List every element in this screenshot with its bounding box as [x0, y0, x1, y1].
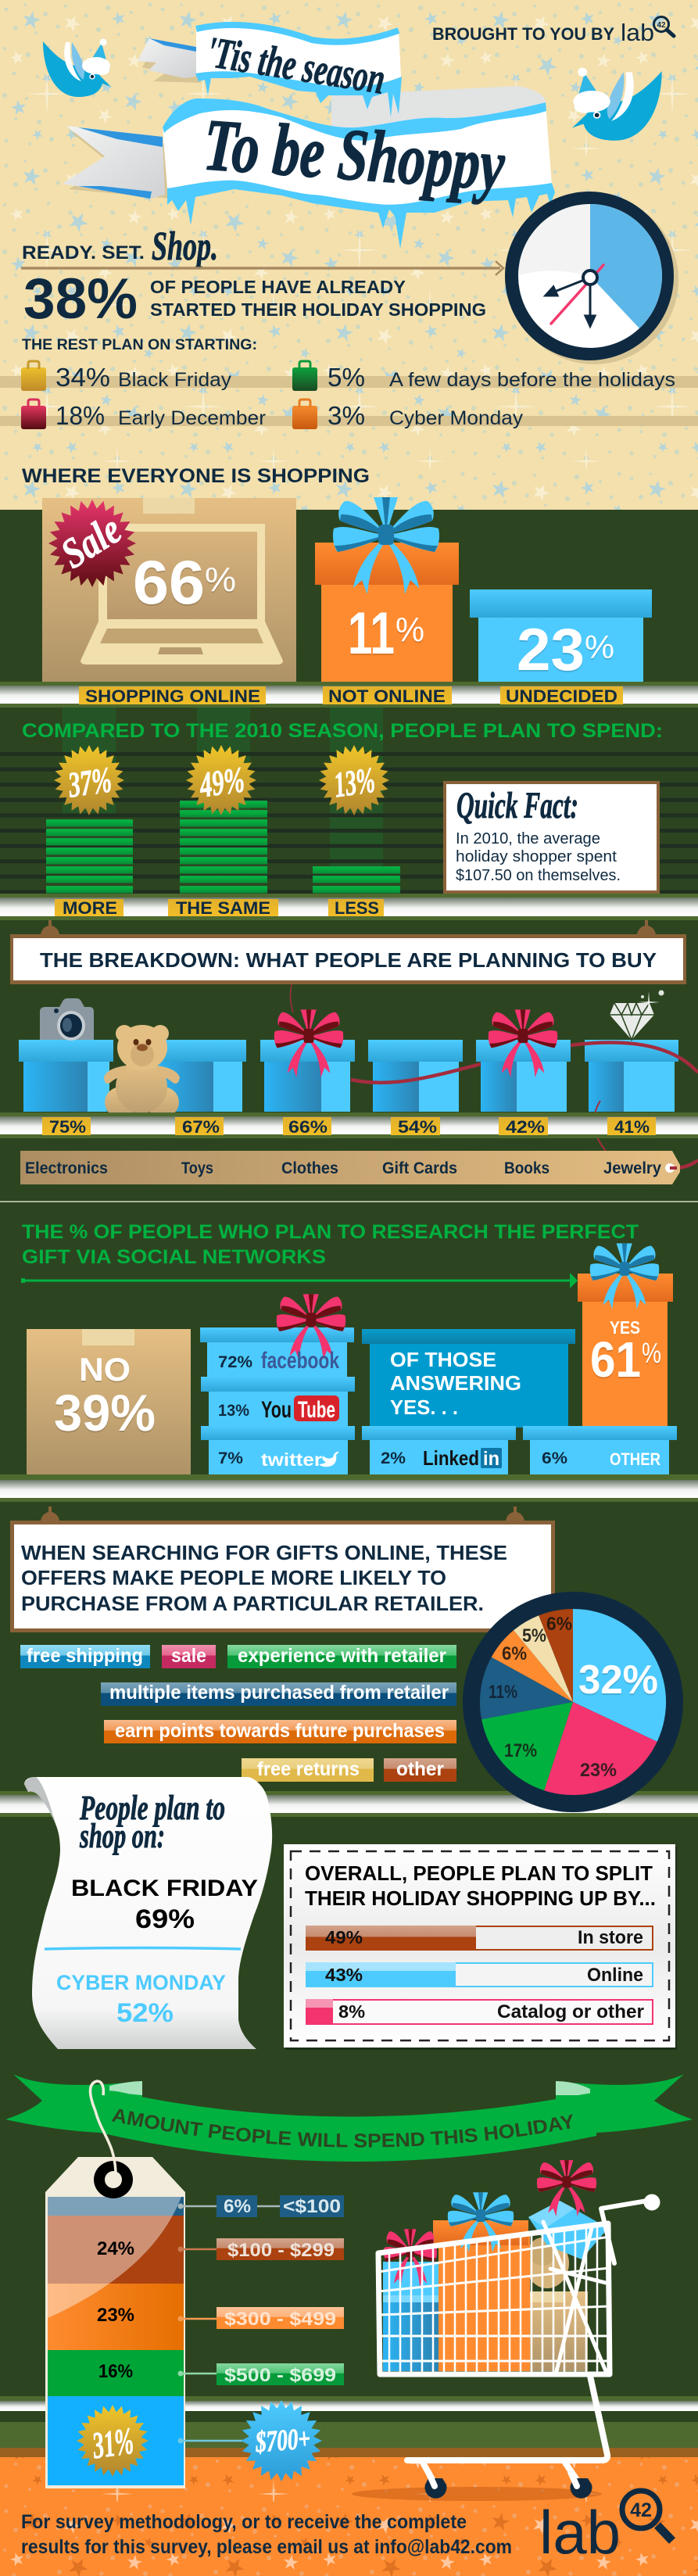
burst: 700 dollars plus: [241, 2400, 322, 2481]
bar: catalog or other: Catalog or other: [497, 2001, 644, 2022]
cart contents: [383, 2201, 608, 2371]
burst: 13 percent: [319, 745, 389, 815]
logo: lab42: lab: [539, 2498, 621, 2567]
icon: camera: [40, 998, 94, 1041]
ribbon: red string through gifts (back): [291, 984, 293, 1012]
panel: of those answering yes: ANSWERING: [390, 1371, 521, 1395]
panel: other gift: 6%: [542, 1449, 567, 1467]
heading: where everyone is shopping: WHERE EVERYONE IS SHOPPING: [22, 465, 370, 487]
label: 66 percent: 66%: [288, 1117, 328, 1137]
burst: 49 percent: 49%: [196, 759, 247, 805]
pie chart: offers: 6%: [502, 1643, 527, 1664]
legend item: earn points: earn points towards future purchases: [115, 1720, 445, 1742]
row: twitter: [218, 1449, 339, 1470]
panel: undecided gift: [470, 589, 652, 683]
pie chart: offers: 17%: [504, 1740, 537, 1761]
bar: catalog or other: 8%: [338, 2001, 365, 2022]
gift: gift cards: [368, 1040, 463, 1112]
icon: gold shopping bag: [21, 361, 46, 391]
heading: research via social networks: GIFT VIA SOCIAL NETWORKS: [22, 1246, 326, 1268]
shelf 1 with labels: [0, 682, 698, 708]
bar: online: 43%: [325, 1965, 363, 1985]
panel: split of shopping: THEIR HOLIDAY SHOPPING UP BY...: [305, 1886, 656, 1910]
legend item: sale: [162, 1645, 216, 1668]
label: 75 percent: 75%: [49, 1117, 86, 1137]
row: facebook: [218, 1348, 339, 1374]
panel: no 39 percent box: NO: [79, 1351, 131, 1388]
scroll: people plan to shop on: 69%: [135, 1904, 195, 1934]
list: when the rest plan on starting: Black Friday: [118, 369, 232, 391]
pie chart: offers: 6%: [546, 1614, 572, 1635]
row: facebook: 72%: [218, 1353, 252, 1371]
icon: blue bow in cart: [448, 2192, 514, 2252]
label: 42 percent: 42%: [506, 1117, 545, 1137]
row: youtube: [218, 1395, 339, 1423]
row: twitter: twitter: [261, 1449, 322, 1470]
callout: quick fact: Quick Fact:: [456, 785, 578, 826]
callout: quick fact: In 2010, the average: [456, 830, 600, 847]
sign: when searching for gifts online: [10, 1507, 555, 1632]
label: more: MORE: [63, 898, 117, 918]
bars: more: [46, 819, 133, 893]
scroll: people plan to shop on: CYBER MONDAY: [56, 1971, 226, 1994]
price tag: spend amounts: 24%: [97, 2238, 134, 2259]
heading: compared to 2010: COMPARED TO THE 2010 SEASON, PEOPLE PLAN TO SPEND:: [22, 720, 663, 742]
bars: less: [313, 866, 400, 893]
brought to you by credit: 42: [657, 21, 666, 30]
list: when the rest plan on starting: A few days before the holidays: [389, 369, 675, 391]
bars: the same: [180, 801, 267, 893]
legend item: free returns: free returns: [257, 1758, 360, 1780]
panel: yes 61 percent gift: YES: [610, 1317, 640, 1338]
price tag: gift categories: Gift Cards: [382, 1159, 457, 1177]
price tag: spend amounts: 23%: [97, 2305, 134, 2326]
subheading: the rest plan: THE REST PLAN ON STARTING:: [22, 336, 257, 353]
panel: not online gift: 11: [348, 600, 395, 667]
icon: red bow on top of cart: [537, 2160, 596, 2216]
brought to you by credit: BROUGHT TO YOU BY: [432, 24, 614, 44]
list: when the rest plan on starting: 34%: [55, 363, 110, 392]
arrow: green to yes gift: [21, 1273, 578, 1288]
background: cream starry wall: [0, 0, 698, 510]
legend item: other: [384, 1758, 456, 1782]
row: twitter: 7%: [218, 1449, 243, 1467]
icon: red bow on stack: [277, 1294, 345, 1360]
banner: amount people will spend: AMOUNT PEOPLE WILL SPEND THIS HOLIDAY: [111, 2109, 572, 2148]
footer: survey methodology: results for this survey, please email us at info@lab42.com: [21, 2536, 512, 2558]
callout: quick fact: holiday shopper spent: [456, 848, 617, 865]
scroll: people plan to shop on: 52%: [116, 1998, 174, 2028]
burst: 31 percent: 31%: [89, 2420, 136, 2467]
sign: the breakdown: THE BREAKDOWN: WHAT PEOPLE ARE PLANNING TO BUY: [40, 948, 657, 972]
icon: right blue bird with santa hat: [572, 68, 662, 141]
scroll: people plan to shop on: BLACK FRIDAY: [71, 1876, 258, 1901]
pie chart: offers: 32%: [578, 1657, 658, 1703]
shelf 4: [0, 1474, 698, 1502]
panel: shopping online box: [42, 498, 296, 682]
panel: no 39 percent box: 39%: [54, 1384, 156, 1442]
panel: compared to 2010 spending: [0, 708, 698, 894]
label: the same: THE SAME: [176, 898, 270, 918]
panel: social network gift stack: [200, 1294, 355, 1474]
pie chart: offers: 11%: [489, 1682, 517, 1703]
bar: in store: 49%: [325, 1927, 363, 1947]
sign: when searching for gifts online: PURCHASE FROM A PARTICULAR RETAILER.: [21, 1592, 484, 1615]
gift: clothes: [260, 1040, 355, 1112]
icon: tag hole: [94, 2161, 133, 2198]
price tag: gift categories: Books: [504, 1159, 549, 1177]
brought to you by credit: [432, 17, 674, 46]
price tag: gift categories: Clothes: [281, 1159, 338, 1177]
heading: Ready. Set. Shop.: READY. SET.: [22, 242, 145, 263]
title ribbon: To be Shoppy: To be Shoppy: [202, 104, 507, 206]
pie chart: offers: 23%: [580, 1760, 617, 1781]
icon: red shopping bag: [21, 399, 46, 429]
heading: Ready. Set. Shop.: Shop.: [152, 224, 218, 269]
icon: laptop: [81, 524, 283, 665]
shelf 5: [0, 1791, 698, 1817]
legend item: free shipping: free shipping: [27, 1645, 143, 1667]
pie chart: offers: [463, 1592, 683, 1812]
background: orange floor: [0, 2457, 698, 2576]
price tag: spend amounts: 16%: [98, 2361, 133, 2382]
gift: electronics: [19, 998, 113, 1112]
label: 41 percent: 41%: [614, 1117, 650, 1137]
panel: yes 61 percent gift: [578, 1243, 673, 1426]
legend item: 6 percent: [217, 2195, 257, 2217]
list: when the rest plan on starting: [0, 361, 698, 430]
bar: online: Online: [587, 1965, 643, 1986]
gift: toys: [152, 1040, 246, 1112]
gift: jewelry: [585, 990, 678, 1112]
heading: research via social networks: THE % OF PEOPLE WHO PLAN TO RESEARCH THE PERFECT: [22, 1221, 639, 1243]
shelf 3 with percent labels: [0, 1112, 698, 1138]
background: dark green wall: [0, 510, 698, 2457]
arrow: to clock: [21, 261, 503, 275]
list: when the rest plan on starting: 18%: [55, 401, 105, 430]
sign: when searching for gifts online: WHEN SEARCHING FOR GIFTS ONLINE, THESE: [21, 1541, 507, 1564]
ribbon: red string between gifts: [351, 1042, 698, 1168]
panel: other gift: [523, 1426, 677, 1474]
bar: catalog or other: [306, 1999, 653, 2025]
cart wheels: [425, 2472, 592, 2499]
icon: blue bow: [333, 497, 439, 594]
burst: 49 percent: [186, 745, 256, 815]
panel: yes 61 percent gift: %: [642, 1337, 661, 1369]
legend item: experience with retailer: experience with retailer: [238, 1645, 446, 1667]
title ribbon: 'Tis the season: [138, 25, 546, 133]
row: youtube: You: [261, 1397, 292, 1423]
label: 54 percent: [391, 1117, 440, 1137]
panel: no 39 percent box: [27, 1329, 191, 1474]
logo: lab42: [539, 2491, 672, 2567]
clock: 38 percent started: [505, 192, 678, 364]
price tag: gift categories: Electronics: [25, 1159, 108, 1177]
footer: survey methodology: For survey methodology, or to receive the complete: [21, 2511, 467, 2533]
callout: quick fact: [443, 781, 660, 894]
panel: linkedin gift: [362, 1426, 516, 1474]
burst: 37 percent: [54, 745, 124, 815]
logo: lab42: 42: [630, 2499, 652, 2521]
legend: spend amounts: [178, 2195, 344, 2481]
pie chart: offers: 5%: [522, 1625, 546, 1646]
panel: of those answering yes: [362, 1329, 575, 1428]
burst: 13 percent: 13%: [331, 760, 378, 804]
panel: of those answering yes: OF THOSE: [390, 1348, 496, 1371]
heading: research via social networks: [22, 1221, 639, 1268]
burst: 31 percent: [77, 2405, 149, 2477]
label: 42 percent: [499, 1117, 548, 1137]
panel: undecided gift: 23: [517, 617, 585, 683]
legend item: sale: sale: [171, 1645, 206, 1667]
bar: in store: [306, 1926, 653, 1951]
legend item: multiple items: multiple items purchased from retailer: [109, 1682, 449, 1704]
callout: quick fact: $107.50 on themselves.: [456, 867, 621, 884]
floor rail and baseboard: [0, 2396, 698, 2457]
stat: 38 percent started shopping: [23, 267, 486, 331]
panel: shopping online box: 66: [133, 547, 205, 617]
scroll: people plan to shop on: shop on:: [79, 1817, 165, 1855]
icon: shopping cart with gifts: [352, 2160, 660, 2501]
icon: green shopping bag: [292, 361, 317, 391]
row: youtube: Tube: [298, 1397, 335, 1423]
label: less: LESS: [335, 898, 379, 918]
scroll: people plan to shop on: People plan to: [79, 1789, 225, 1827]
legend item: 6 percent: 6%: [224, 2196, 251, 2217]
label: shopping online: SHOPPING ONLINE: [85, 686, 260, 706]
stat: 38 percent started shopping: STARTED THEIR HOLIDAY SHOPPING: [150, 299, 486, 320]
banner: amount people will spend: [5, 2074, 693, 2162]
legend item: other: other: [396, 1758, 444, 1780]
panel: split of shopping: [284, 1844, 677, 2050]
brought to you by credit: lab: [621, 19, 654, 46]
panel: yes 61 percent gift: 61: [590, 1331, 641, 1388]
panel: not online gift: %: [396, 611, 424, 649]
legend: offers: [20, 1645, 456, 1782]
panel: not online gift: [315, 497, 459, 682]
legend item: 500 to 699 dollars: $500 - $699: [224, 2365, 336, 2386]
footer: survey methodology: [21, 2511, 512, 2558]
label: not online: NOT ONLINE: [328, 686, 446, 706]
icon: sale burst: Sale: [52, 505, 129, 578]
gift: books: [476, 1040, 571, 1112]
burst: 700 dollars plus: $700+: [254, 2422, 311, 2459]
label: 54 percent: 54%: [398, 1117, 437, 1137]
icon: diamond: [610, 990, 664, 1040]
legend item: 100 to 299 dollars: $100 - $299: [227, 2240, 335, 2261]
bar: in store: In store: [578, 1927, 643, 1948]
icon: blue bow on yes gift: [590, 1243, 659, 1309]
panel: other gift: OTHER: [610, 1449, 660, 1469]
stat: 38 percent started shopping: 38%: [23, 267, 138, 331]
legend item: 300 to 499 dollars: $300 - $499: [224, 2309, 336, 2330]
legend item: under 100 dollars: <$100: [283, 2196, 341, 2217]
heading: Ready. Set. Shop.: [22, 224, 218, 269]
price tag: gift categories: Jewelry: [603, 1159, 661, 1177]
list: when the rest plan on starting: Cyber Monday: [389, 407, 524, 429]
panel: shopping online box: %: [205, 561, 236, 599]
icon: red bow on box in cart left: [384, 2229, 437, 2288]
stat: 38 percent started shopping: OF PEOPLE HAVE ALREADY: [150, 277, 406, 297]
panel: linkedin gift: in: [483, 1448, 499, 1470]
icon: orange shopping bag: [292, 399, 317, 429]
sign: the breakdown: [10, 920, 686, 984]
row: youtube: 13%: [218, 1402, 249, 1420]
price tag: gift categories: [20, 1151, 680, 1184]
sign: when searching for gifts online: OFFERS MAKE PEOPLE MORE LIKELY TO: [21, 1566, 446, 1589]
icon: teddy bear: [104, 1025, 180, 1118]
list: when the rest plan on starting: Early December: [118, 407, 266, 429]
label: 67 percent: 67%: [182, 1117, 220, 1137]
panel: linkedin gift: 2%: [381, 1449, 406, 1467]
row: facebook: facebook: [261, 1348, 339, 1374]
bar: online: [306, 1962, 653, 1987]
list: when the rest plan on starting: 3%: [328, 401, 365, 430]
panel: linkedin gift: Linked: [423, 1446, 479, 1470]
icon: left blue bird with santa hat: [43, 39, 111, 97]
panel: of those answering yes: YES. . .: [390, 1395, 458, 1419]
label: undecided: UNDECIDED: [506, 686, 617, 706]
price tag: gift categories: Toys: [181, 1159, 213, 1177]
panel: split of shopping: OVERALL, PEOPLE PLAN TO SPLIT: [305, 1861, 653, 1885]
burst: 37 percent: 37%: [65, 759, 114, 805]
title ribbon: To be Shoppy: [63, 99, 555, 249]
icon: red bow on clothes gift: [274, 1009, 343, 1077]
shelf 2 with labels: [0, 894, 698, 920]
list: when the rest plan on starting: 5%: [328, 363, 365, 392]
title ribbon: 'Tis the season: 'Tis the season: [203, 28, 388, 104]
price tag: spend amounts: [45, 2081, 185, 2488]
icon: red bow on books gift: [489, 1009, 557, 1077]
cart frame: [378, 2194, 660, 2482]
scroll: people plan to shop on: [24, 1777, 272, 2049]
panel: undecided gift: %: [585, 629, 614, 665]
tag string: [91, 2081, 116, 2172]
